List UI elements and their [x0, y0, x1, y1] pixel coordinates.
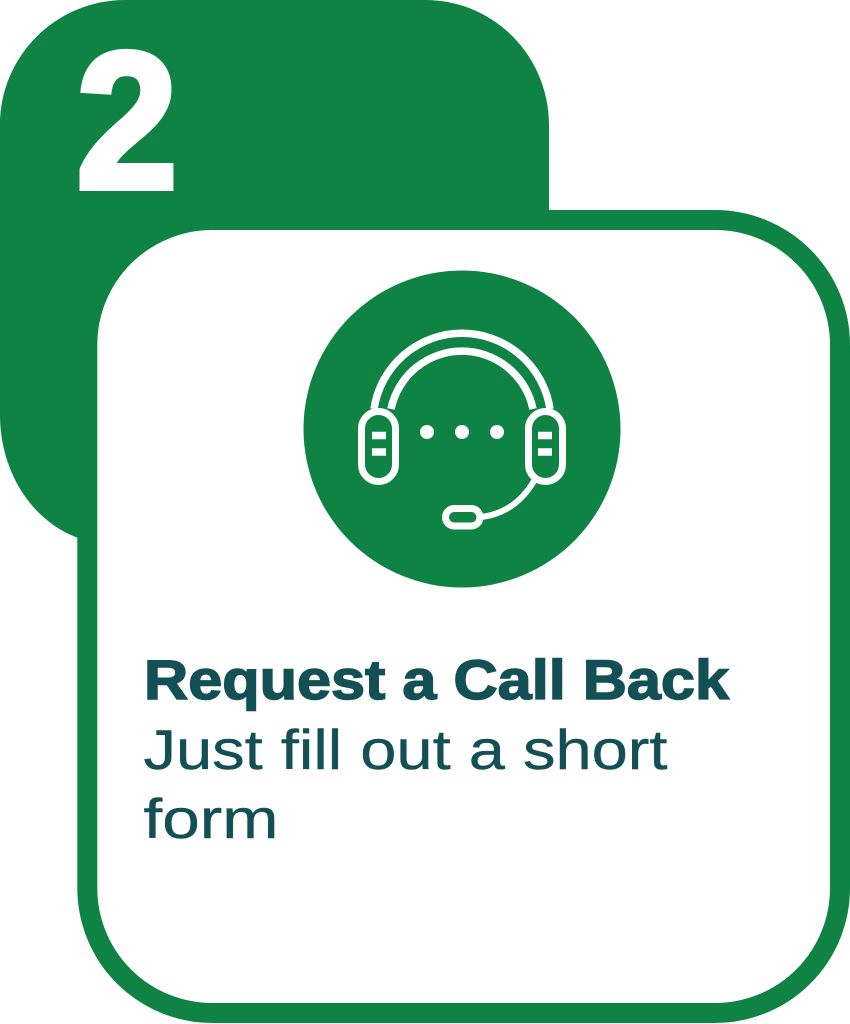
description text: form — [144, 787, 278, 850]
step number: 2 — [76, 13, 178, 230]
description text — [144, 718, 668, 850]
main card — [87, 220, 840, 1013]
heading: Request a Call Back — [144, 648, 730, 711]
description text: Just fill out a short — [144, 718, 668, 781]
back tab panel — [0, 0, 549, 538]
icon: headset in circle — [304, 270, 620, 588]
